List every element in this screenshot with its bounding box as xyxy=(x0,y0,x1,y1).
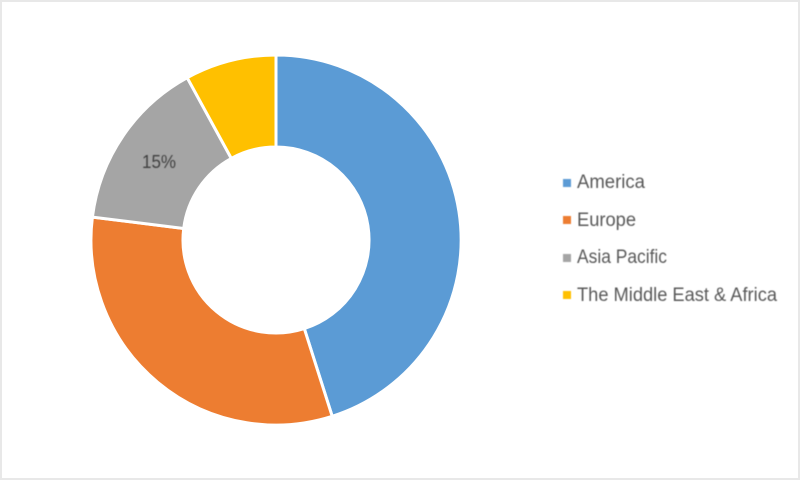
segment: The Middle East & Africa xyxy=(187,55,276,158)
legend item: Asia Pacific: Asia Pacific xyxy=(577,247,667,268)
data label: 15%: 15% xyxy=(142,152,176,172)
segment: America xyxy=(276,55,461,416)
legend item: America: America xyxy=(577,172,645,193)
segment: Europe xyxy=(91,217,332,425)
legend item: Europe: Europe xyxy=(577,210,636,231)
legend xyxy=(563,172,777,306)
donut chart xyxy=(91,55,461,425)
legend item: The Middle East & Africa: The Middle East & Africa xyxy=(577,285,777,306)
segment: Asia Pacific xyxy=(92,78,231,228)
